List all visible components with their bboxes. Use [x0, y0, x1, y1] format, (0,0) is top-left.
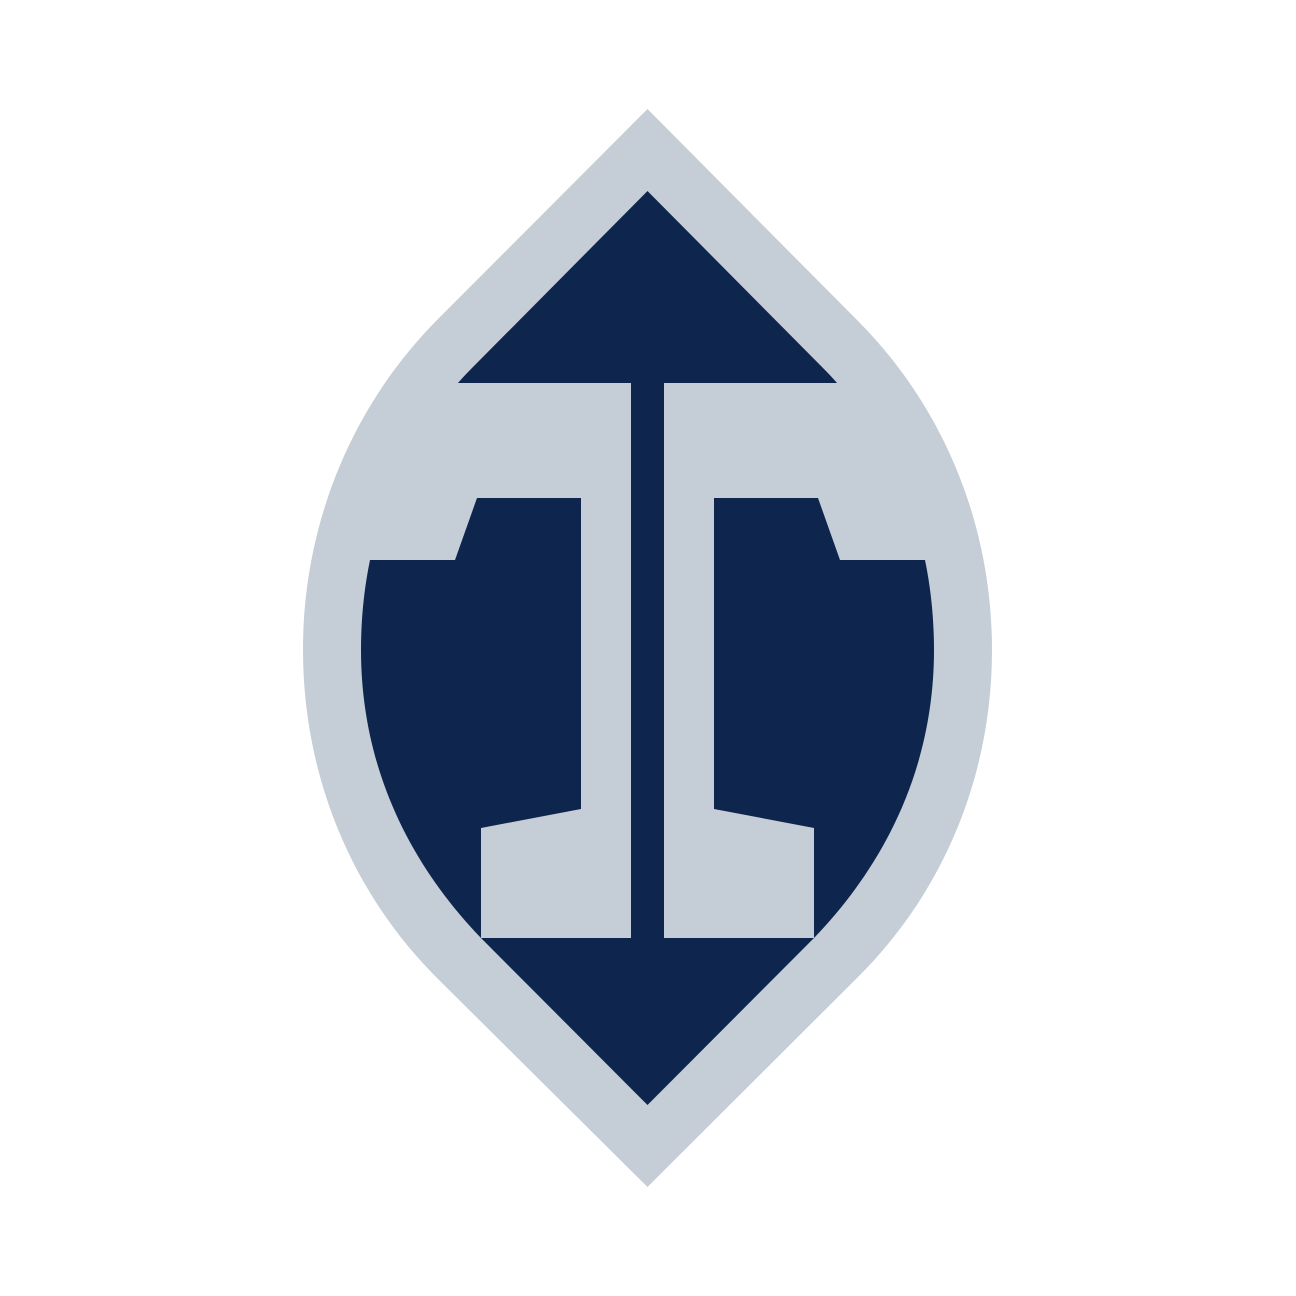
left navy panel [361, 498, 581, 938]
right navy panel [714, 498, 934, 938]
outer shield: light grey leaf shape [303, 109, 992, 1187]
top arrowhead with centre stem [458, 191, 837, 938]
bottom navy diamond [481, 938, 814, 1105]
